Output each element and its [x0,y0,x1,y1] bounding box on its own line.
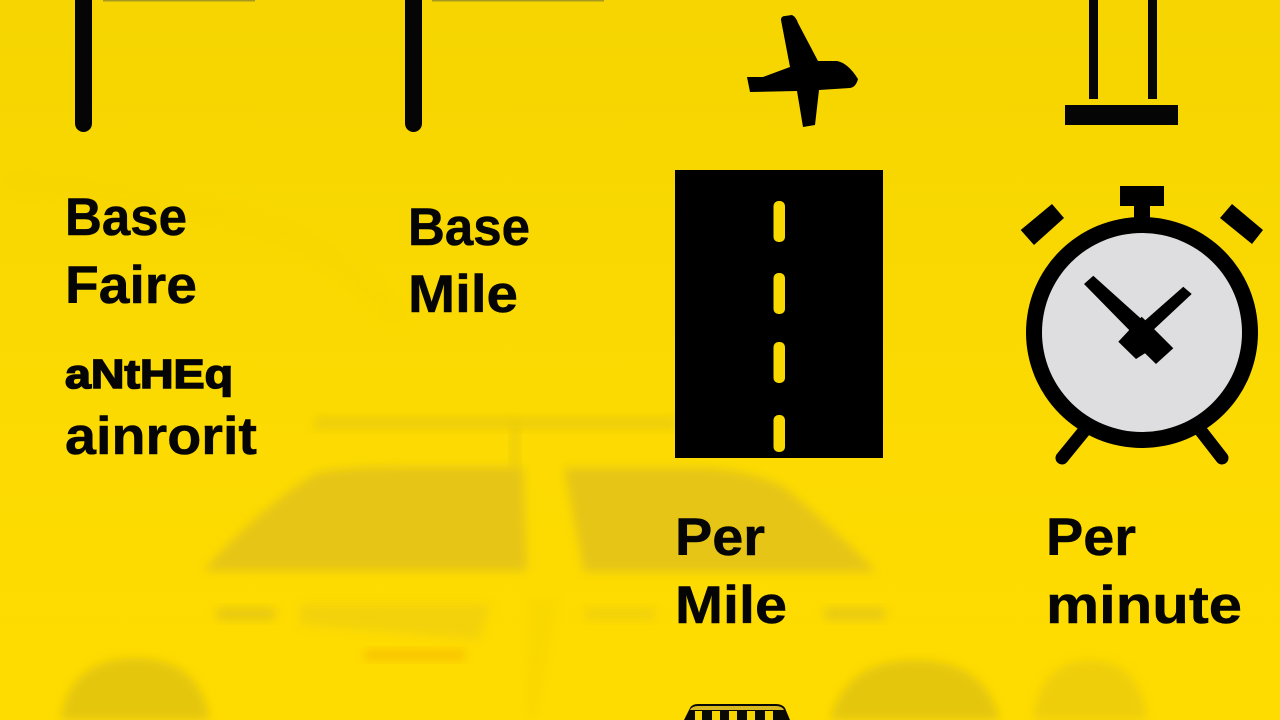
label: Per minute [1046,508,1242,635]
label: garbled line and airport: ainrorit [65,407,257,466]
icon: taxi roof sign [684,704,790,720]
label: Base Faire: Base [65,188,187,247]
label: garbled line and airport [65,351,257,466]
icon: road [675,170,883,458]
label: Per Mile: Per [675,508,765,567]
icon: stand with base [1065,0,1178,125]
signpost pole: base mile [405,0,604,132]
label: garbled line and airport: aNtHEq [65,351,233,397]
label: Base Mile: Mile [408,265,518,324]
icon: alarm clock [1021,186,1263,458]
label: Per minute: Per [1046,508,1136,567]
blurred taxi photo [0,180,1148,720]
label: Per Mile [675,508,787,635]
icon: airplane [747,15,858,127]
label: Per minute: minute [1046,576,1242,635]
label: Base Faire [65,188,197,315]
label: Base Faire: Faire [65,256,197,315]
label: Base Mile: Base [408,198,530,257]
label: Base Mile [408,198,530,324]
label: Per Mile: Mile [675,576,787,635]
signpost pole: base fare [75,0,255,132]
